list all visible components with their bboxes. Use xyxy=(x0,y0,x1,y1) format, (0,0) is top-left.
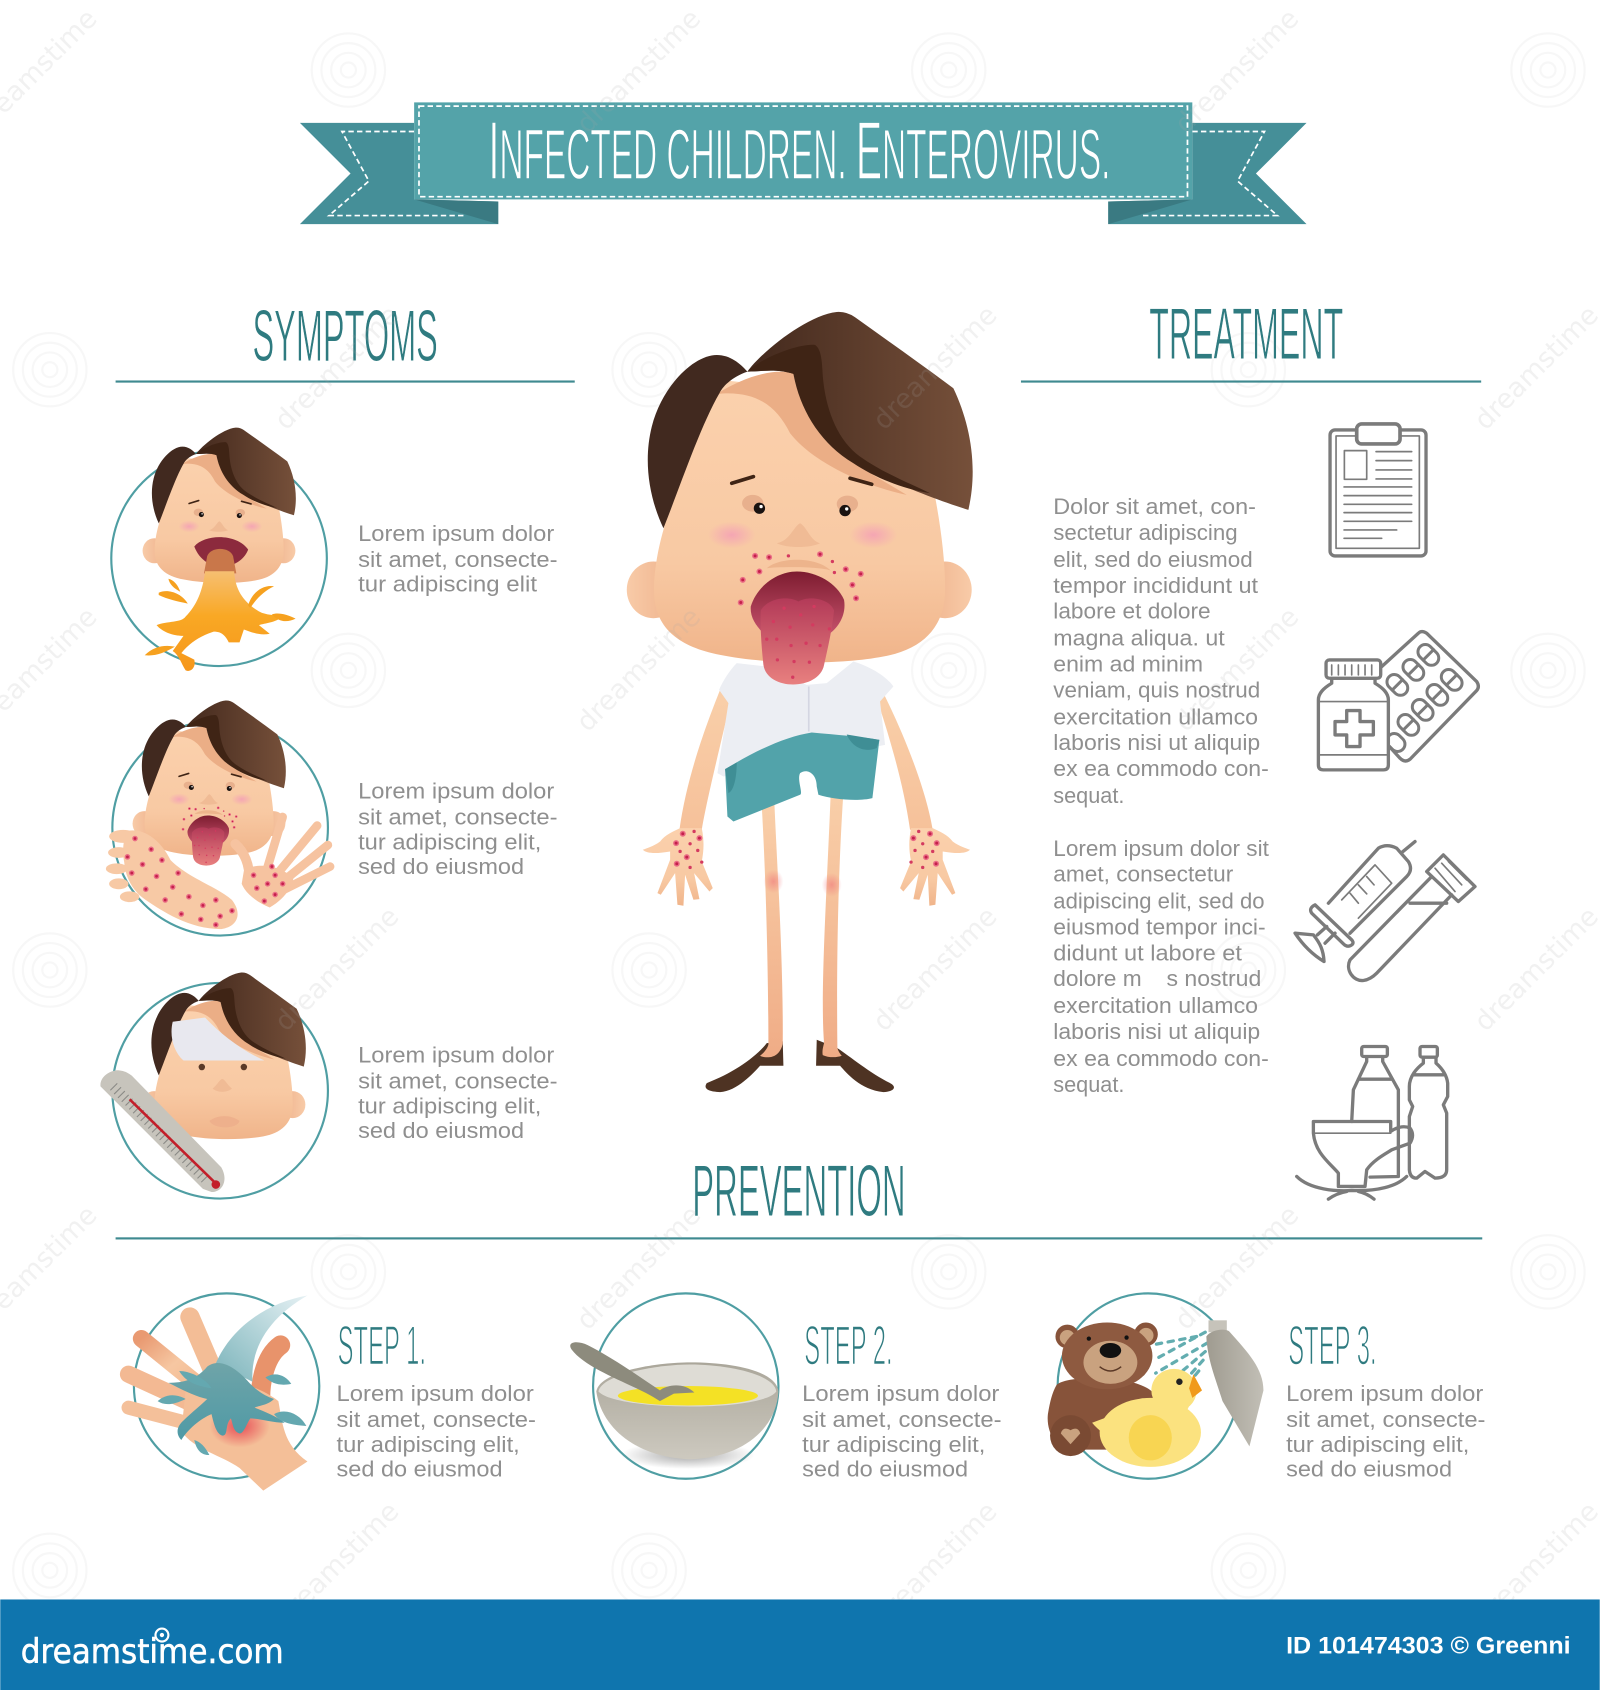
step 1 text: Lorem ipsum dolor xyxy=(337,1381,534,1406)
symptom 1 text xyxy=(358,521,557,597)
step 2 text: STEP 2. xyxy=(804,1314,893,1377)
treatment text 2: Lorem ipsum dolor sit xyxy=(1053,836,1270,861)
step 2 text: Lorem ipsum dolor xyxy=(802,1381,1000,1406)
treatment text 1: enim ad minim xyxy=(1053,651,1203,676)
symptom 2 text: Lorem ipsum dolor xyxy=(358,779,555,804)
head with rash and protruding tongue xyxy=(627,312,973,684)
diagonal watermark text: dreamstime xyxy=(571,602,707,738)
step 3 illustration: washing toys xyxy=(1048,1293,1263,1479)
treatment text 2: s nostrud xyxy=(1166,966,1261,991)
diagonal watermark text: dreamstime xyxy=(1169,1200,1305,1336)
treatment text 1: sequat. xyxy=(1053,783,1124,808)
symptom 3 text: sit amet, consecte- xyxy=(358,1069,557,1094)
treatment text 2: adipiscing elit, sed do xyxy=(1053,889,1265,914)
symptom 3 text xyxy=(358,1043,557,1143)
step 1 text: STEP 1. xyxy=(338,1314,426,1377)
hand with rash xyxy=(235,817,330,908)
step 1 text: tur adipiscing elit, xyxy=(337,1432,520,1457)
treatment text 2: eiusmod tempor inci- xyxy=(1053,914,1266,939)
step 3 text: STEP 3. xyxy=(1288,1314,1377,1377)
treatment text 1: sectetur adipiscing xyxy=(1053,520,1238,545)
foot with rash xyxy=(106,830,238,929)
icon: syringe and test tube xyxy=(1295,842,1475,981)
step 1 illustration: washing hands xyxy=(129,1293,319,1491)
step 1 text: sed do eiusmod xyxy=(337,1457,503,1482)
symptom 2 text: tur adipiscing elit, xyxy=(358,829,541,854)
step 3 text: sit amet, consecte- xyxy=(1286,1407,1485,1432)
symptom 2 text: sed do eiusmod xyxy=(358,854,524,879)
footer bar xyxy=(0,1599,1600,1690)
treatment text 2: exercitation ullamco xyxy=(1053,993,1258,1018)
treatment text 1: ex ea commodo con- xyxy=(1053,756,1269,781)
step 3 text: tur adipiscing elit, xyxy=(1286,1432,1469,1457)
treatment text 1: labore et dolore xyxy=(1053,599,1211,624)
treatment text 1: elit, sed do eiusmod xyxy=(1053,547,1253,572)
treatment text 1: Dolor sit amet, con- xyxy=(1053,494,1256,519)
step 2 text: tur adipiscing elit, xyxy=(802,1432,985,1457)
treatment text 2: laboris nisi ut aliquip xyxy=(1053,1019,1260,1044)
diagonal watermark text: dreamstime xyxy=(571,3,707,140)
step 2 illustration: bowl of food xyxy=(570,1293,778,1479)
step 3 text: sed do eiusmod xyxy=(1286,1457,1452,1482)
diagonal watermark text: dreamstime xyxy=(1169,602,1305,738)
treatment text 1: magna aliqua. ut xyxy=(1053,626,1225,651)
symptom 1 text: tur adipiscing elit xyxy=(358,572,538,597)
treatment text 2: didunt ut labore et xyxy=(1053,940,1243,965)
diagonal watermark text: dreamstime xyxy=(867,1496,1003,1632)
icon: bottles and toilet xyxy=(1297,1047,1448,1199)
heading: prevention: PREVENTION xyxy=(692,1150,906,1232)
heading: treatment: TREATMENT xyxy=(1149,293,1343,375)
step 1 text xyxy=(337,1314,536,1482)
treatment text 2: amet, consectetur xyxy=(1053,862,1234,887)
diagonal watermark text: dreamstime xyxy=(269,1496,405,1632)
diagonal watermark text: dreamstime xyxy=(269,901,405,1037)
symptom 3: fever and thermometer xyxy=(100,972,328,1199)
treatment text 2 xyxy=(1053,836,1270,1097)
step 1 text: sit amet, consecte- xyxy=(337,1407,536,1432)
diagonal watermark text: dreamstime xyxy=(867,300,1003,436)
treatment text 2: dolore m xyxy=(1053,966,1142,991)
symptom 2: rash on mouth, hand and foot xyxy=(106,700,330,936)
symptom 3 text: sed do eiusmod xyxy=(358,1118,524,1143)
title ribbon banner xyxy=(300,102,1307,224)
treatment text 1: tempor incididunt ut xyxy=(1053,573,1259,598)
diagonal watermark text: dreamstime xyxy=(1169,3,1305,140)
treatment text 2: sequat. xyxy=(1053,1072,1124,1097)
diagonal watermark text: dreamstime xyxy=(571,1200,707,1336)
icon: medicine bottle and pill blister xyxy=(1318,632,1478,770)
step 3 text: Lorem ipsum dolor xyxy=(1286,1381,1484,1406)
treatment text 1: exercitation ullamco xyxy=(1053,704,1258,729)
diagonal watermark text: dreamstime xyxy=(269,300,405,436)
title: INFECTED CHILDREN. ENTEROVIRUS. xyxy=(489,104,1110,197)
treatment text 1 xyxy=(1053,494,1269,808)
footer image id: ID 101474303 © Greenni xyxy=(1286,1633,1571,1659)
symptom 3 text: tur adipiscing elit, xyxy=(358,1093,541,1118)
treatment text 1: veniam, quis nostrud xyxy=(1053,677,1260,702)
symptom 3 text: Lorem ipsum dolor xyxy=(358,1043,555,1068)
symptom 2 text xyxy=(358,779,557,879)
symptom 1 text: sit amet, consecte- xyxy=(358,547,557,572)
step 2 text: sed do eiusmod xyxy=(802,1457,968,1482)
step 2 text: sit amet, consecte- xyxy=(802,1407,1002,1432)
icon: clipboard xyxy=(1330,424,1426,556)
treatment text 2: ex ea commodo con- xyxy=(1053,1046,1269,1071)
central figure: sick boy xyxy=(627,312,973,1092)
treatment text 1: laboris nisi ut aliquip xyxy=(1053,730,1260,755)
symptom 1 text: Lorem ipsum dolor xyxy=(358,521,555,546)
step 2 text xyxy=(802,1314,1002,1482)
symptom 2 text: sit amet, consecte- xyxy=(358,805,557,830)
footer logo: dreamstime.com xyxy=(21,1632,284,1671)
body: shirt, shorts, arms, legs, hands and shoes xyxy=(643,661,970,1092)
diagonal watermark text: dreamstime xyxy=(867,901,1003,1037)
heading: symptoms: SYMPTOMS xyxy=(252,295,438,377)
symptom 1: vomiting illustration xyxy=(111,428,327,671)
step 3 text xyxy=(1286,1314,1485,1482)
